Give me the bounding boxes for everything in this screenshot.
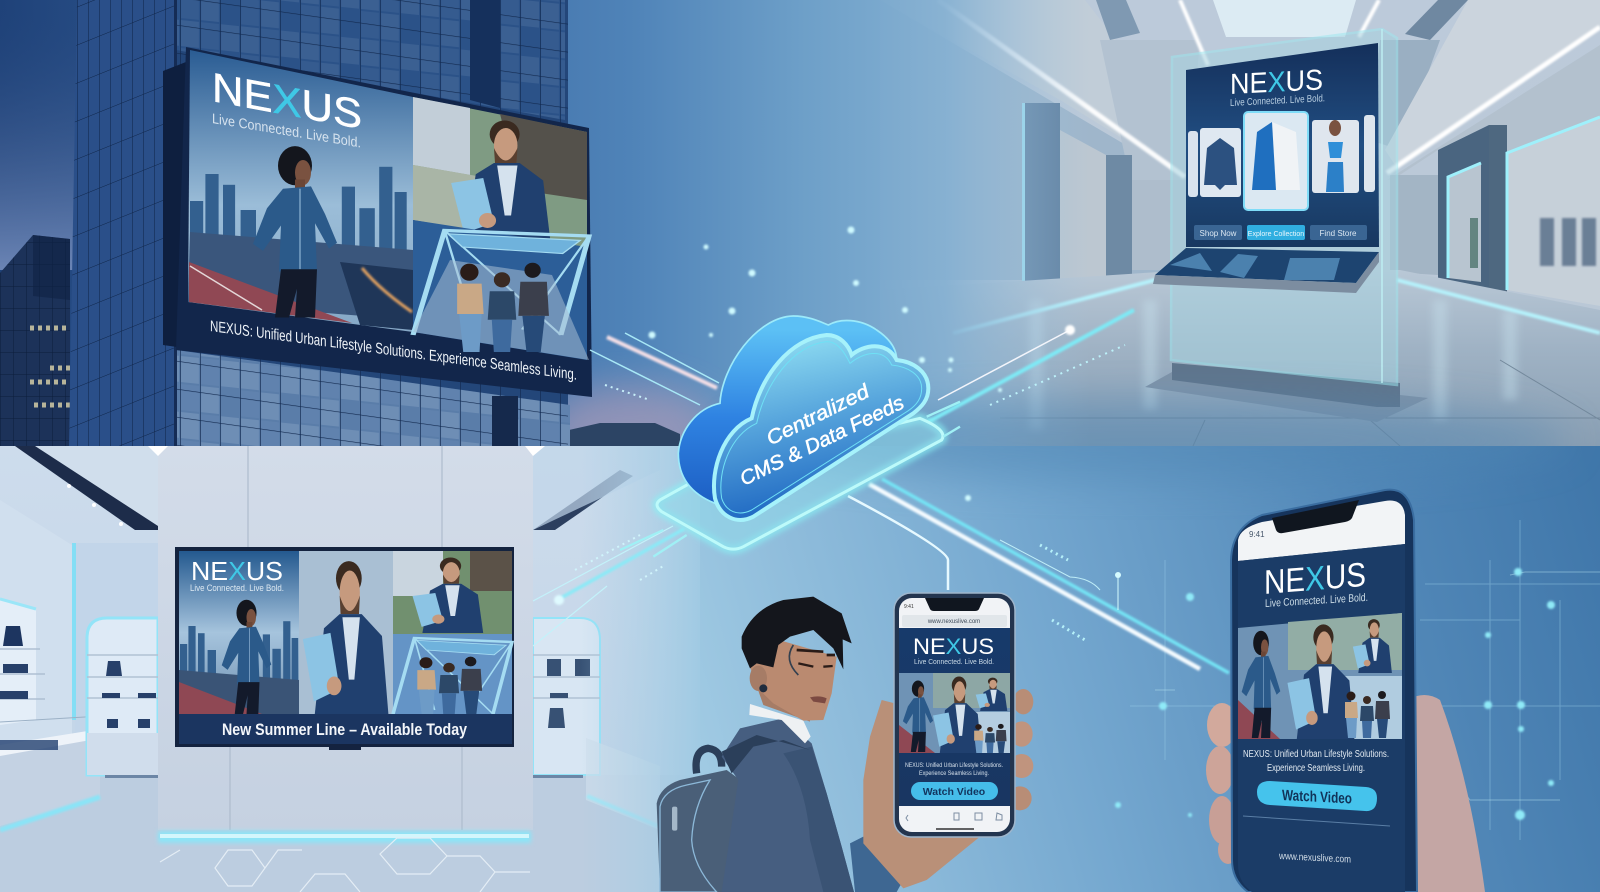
large phone collage (1238, 613, 1402, 739)
person with backpack (657, 597, 1033, 892)
glass kiosk (1145, 29, 1428, 422)
kiosk buttons: Shop Now (1200, 229, 1237, 238)
floor glow strip (158, 831, 531, 843)
kiosk touch panel (1153, 248, 1379, 293)
wall TV (175, 547, 514, 750)
small phone tagline: Live Connected. Live Bold. (914, 659, 994, 666)
data link: bottom-right (848, 479, 1229, 673)
central cloud (620, 316, 960, 557)
large phone: 9:41 (1249, 530, 1265, 539)
TV runner (222, 600, 271, 714)
large phone watch video button: Watch Video (1282, 787, 1352, 807)
data link: top-left (590, 333, 719, 405)
side building (0, 235, 70, 446)
kiosk buttons (1194, 225, 1367, 240)
large phone watch video button (1257, 781, 1377, 811)
collar (749, 704, 811, 743)
product carousel (1188, 112, 1375, 210)
backpack (657, 748, 748, 892)
panel: outdoor building billboard scene (0, 0, 900, 475)
glowing platform (620, 402, 960, 557)
left shelves (0, 599, 102, 830)
cloud front face (714, 335, 928, 520)
floating light particles (648, 226, 1002, 501)
large phone hand (1206, 695, 1485, 892)
large phone tagline: Live Connected. Live Bold. (1265, 592, 1368, 610)
cloud label: CMS & Data Feeds (737, 392, 908, 490)
billboard (163, 47, 592, 397)
small phone URL: www.nexuslive.com (927, 619, 980, 625)
left niche (87, 618, 158, 778)
businessman with tablet (451, 120, 551, 243)
hair (742, 597, 852, 669)
hand and sleeve (850, 689, 1033, 892)
kiosk buttons: Find Store (1320, 229, 1357, 238)
main tower (69, 0, 570, 446)
data link: bottom-left (533, 526, 684, 646)
small phone (894, 593, 1015, 837)
panel: retail store TV scene (0, 446, 700, 892)
small phone watch video button: Watch Video (923, 786, 985, 798)
TV caption: New Summer Line – Available Today (222, 720, 467, 739)
small phone copy line two: Experience Seamless Living. (919, 771, 989, 777)
data link: top-right (928, 310, 1134, 422)
large phone copy line two: Experience Seamless Living. (1267, 763, 1365, 774)
billboard caption: NEXUS: Unified Urban Lifestyle Solutions. Experience Seamless Living. (210, 318, 577, 384)
small phone logo: NEXUS (913, 634, 994, 659)
woman runner (253, 146, 337, 318)
TV top right man (413, 558, 483, 633)
billboard logo: NEXUS (212, 64, 362, 138)
cloud label: Centralized (763, 380, 874, 450)
small phone: 9:41 (904, 604, 914, 610)
face (750, 638, 837, 721)
kiosk logo: NEXUS (1230, 64, 1323, 101)
cloud extrusion (678, 316, 928, 517)
circuit lines and nodes (1115, 520, 1600, 840)
small phone collage (899, 673, 1010, 753)
large phone logo: NEXUS (1264, 556, 1366, 602)
kiosk buttons: Explore Collection (1248, 231, 1304, 238)
large phone URL: www.nexuslive.com (1278, 851, 1351, 866)
group of friends (457, 263, 549, 352)
right niche (533, 618, 660, 830)
large phone copy: NEXUS: Unified Urban Lifestyle Solutions. (1243, 749, 1389, 760)
panel: smartphone scene background (700, 400, 1600, 892)
TV logo: NEXUS (191, 556, 283, 586)
centre wall (148, 446, 545, 830)
billboard tagline: Live Connected. Live Bold. (212, 110, 361, 151)
TV group (417, 657, 482, 714)
kiosk tagline: Live Connected. Live Bold. (1230, 93, 1325, 109)
small phone watch video button (911, 782, 998, 800)
TV main man (303, 561, 388, 714)
large phone (1231, 490, 1417, 892)
panel: shopping mall kiosk scene (800, 0, 1600, 446)
small phone copy: NEXUS: Unified Urban Lifestyle Solutions. (905, 763, 1003, 769)
jacket (722, 718, 854, 892)
TV tagline: Live Connected. Live Bold. (190, 583, 284, 594)
